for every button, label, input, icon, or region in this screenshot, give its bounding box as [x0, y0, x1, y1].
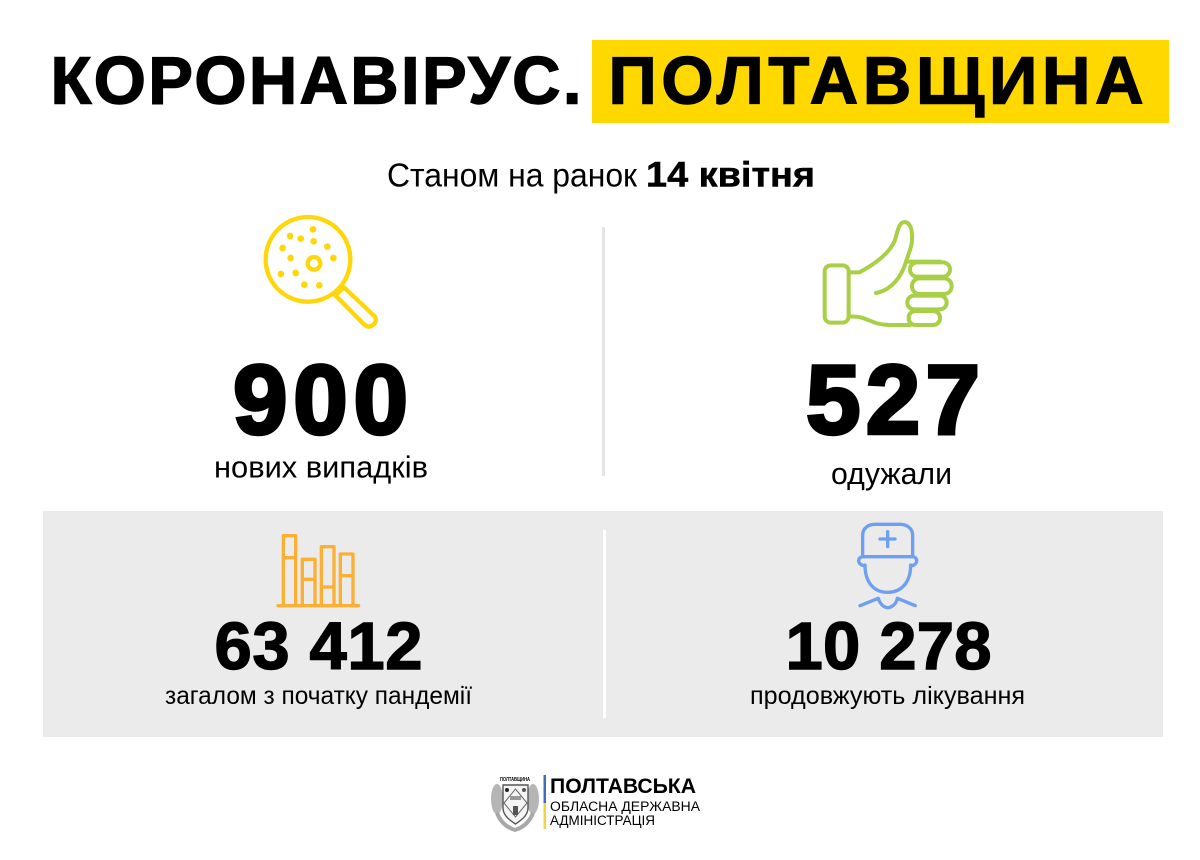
title: Poltava region: ПОЛТАВЩИНА: [608, 44, 1144, 118]
panel: total since start of pandemic: [165, 536, 472, 710]
icon: coat of arms: ПОЛТАВЩИНА: [500, 777, 530, 783]
logo text: АДМІНІСТРАЦІЯ: [550, 813, 655, 828]
label: new cases: нових випадків: [214, 450, 428, 484]
label: total: загалом з початку пандемії: [165, 682, 472, 710]
panel: recovered: [806, 222, 980, 491]
label: recovered: одужали: [831, 457, 952, 491]
subtitle: date: Станом на ранок: [387, 158, 637, 195]
title: [50, 40, 1169, 123]
number: new cases: 900: [233, 344, 408, 454]
logo text: ОБЛАСНА ДЕРЖАВНА: [550, 799, 700, 814]
icon: bar chart: [278, 536, 359, 606]
subtitle: date: [387, 156, 815, 195]
number: total: 63 412: [214, 609, 422, 684]
footer logo: Poltava regional administration: [491, 775, 700, 830]
subtitle: date: 14 квітня: [646, 156, 815, 195]
logo text: [550, 775, 700, 828]
icon: thumbs up: [825, 222, 952, 325]
icon: magnifying glass with virus: [266, 217, 376, 327]
title: region name highlight: [592, 40, 1169, 123]
icon: doctor: [859, 524, 917, 608]
logo divider: flag colours: [544, 775, 546, 829]
icon: coat of arms: [491, 777, 539, 830]
panel: new cases: [214, 217, 428, 484]
panel: still in treatment: [750, 524, 1025, 710]
panel: grey totals band: [43, 511, 1163, 737]
label: in treatment: продовжують лікування: [750, 682, 1025, 710]
number: in treatment: 10 278: [786, 609, 992, 684]
number: recovered: 527: [806, 344, 980, 454]
title: coronavirus: КОРОНАВІРУС.: [50, 44, 582, 118]
logo text: ПОЛТАВСЬКА: [550, 775, 696, 798]
